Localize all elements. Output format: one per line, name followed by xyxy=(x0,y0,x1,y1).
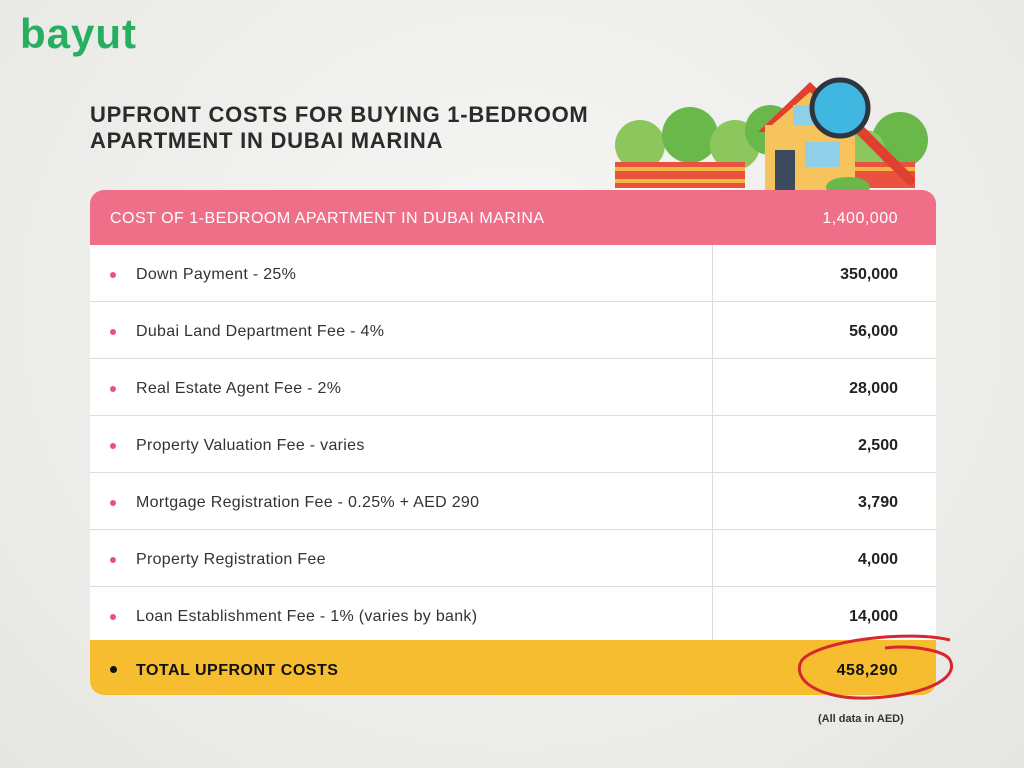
row: DLD fee: 56,000 xyxy=(849,323,898,340)
row: property registration: 4,000 xyxy=(858,551,898,568)
title xyxy=(90,102,589,153)
row: valuation: Property Valuation Fee - varies xyxy=(136,437,365,454)
title: UPFRONT COSTS FOR BUYING 1-BEDROOM xyxy=(90,102,589,127)
table xyxy=(90,190,936,695)
illustration: house with magnifier xyxy=(615,78,928,190)
callout: red circle xyxy=(798,634,954,700)
header row xyxy=(90,190,936,245)
row: DLD fee: Dubai Land Department Fee - 4% xyxy=(136,323,384,340)
row: mortgage registration: Mortgage Registration Fee - 0.25% + AED 290 xyxy=(136,494,479,511)
header row: 1,400,000 xyxy=(822,210,898,227)
row: mortgage registration xyxy=(90,473,936,530)
row: agent fee: 28,000 xyxy=(849,380,898,397)
row: property registration xyxy=(90,530,936,587)
row: property registration: Property Registration Fee xyxy=(136,551,326,568)
row: down payment: Down Payment - 25% xyxy=(136,266,296,283)
row: agent fee xyxy=(90,359,936,416)
row: loan establishment: Loan Establishment Fee - 1% (varies by bank) xyxy=(136,608,477,625)
header row: COST OF 1-BEDROOM APARTMENT IN DUBAI MARINA xyxy=(110,210,545,227)
row: down payment xyxy=(90,245,936,302)
title: APARTMENT IN DUBAI MARINA xyxy=(90,128,443,153)
row: loan establishment: 14,000 xyxy=(849,608,898,625)
total row xyxy=(90,640,936,695)
row: down payment: 350,000 xyxy=(840,266,898,283)
note: (All data in AED) xyxy=(818,713,904,725)
row: agent fee: Real Estate Agent Fee - 2% xyxy=(136,380,341,397)
total row: TOTAL UPFRONT COSTS xyxy=(136,662,338,679)
row: DLD fee xyxy=(90,302,936,359)
row: loan establishment xyxy=(90,587,936,643)
row: valuation: 2,500 xyxy=(858,437,898,454)
row: mortgage registration: 3,790 xyxy=(858,494,898,511)
row: valuation xyxy=(90,416,936,473)
logo: bayut xyxy=(20,10,137,57)
total row: 458,290 xyxy=(837,662,898,679)
